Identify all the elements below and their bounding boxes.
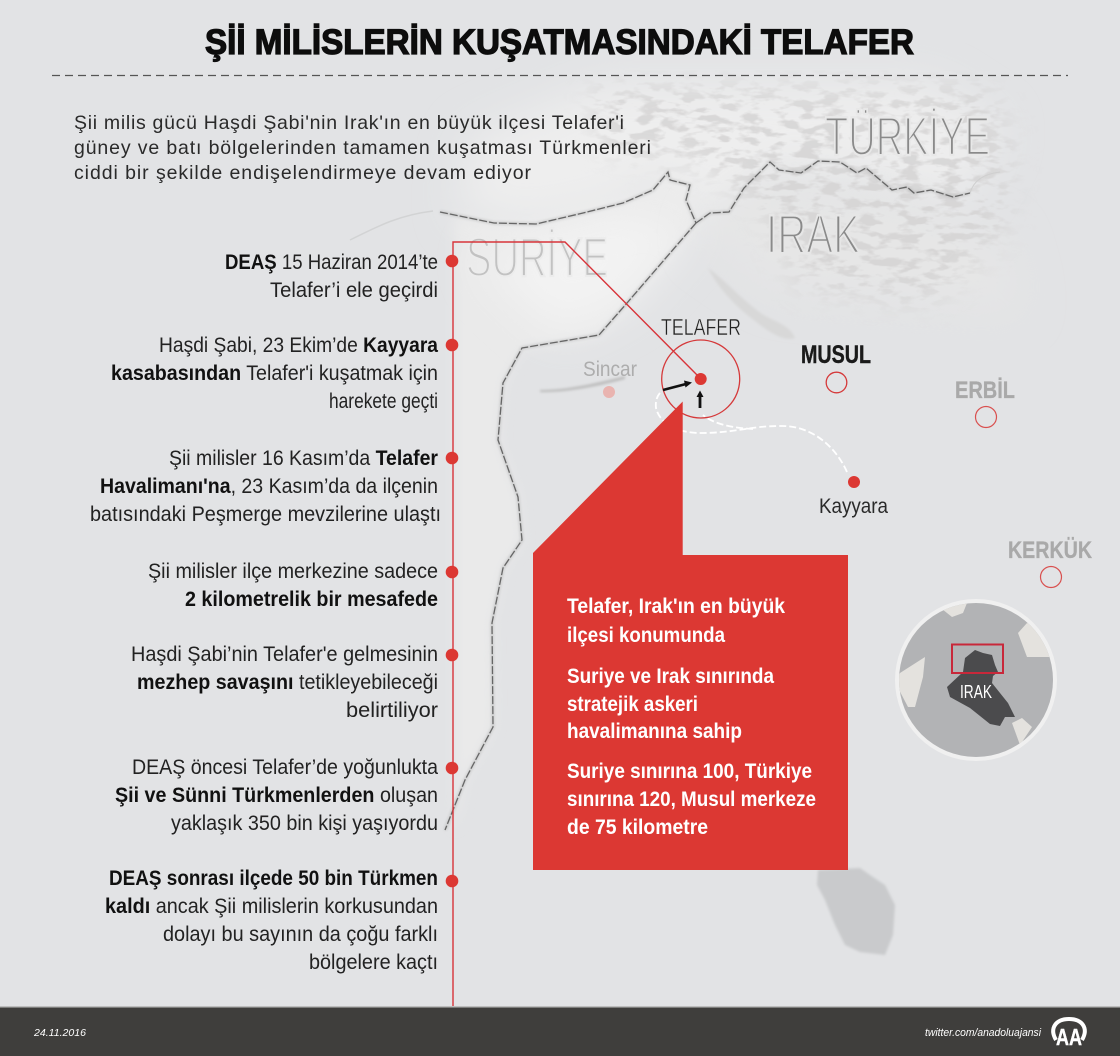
locator label: IRAK xyxy=(960,682,992,702)
intro text: ciddi bir şekilde endişelendirmeye devam ediyor xyxy=(74,162,532,184)
intro text: güney ve batı bölgelerinden tamamen kuşatması Türkmenleri xyxy=(74,137,651,159)
timeline item 5: Haşdi Şabi’nin Telafer'e gelmesinin xyxy=(131,643,438,666)
marker: Telafer xyxy=(662,340,740,418)
fact 2 xyxy=(567,665,774,743)
logo: Anadolu Agency xyxy=(1053,1019,1085,1050)
fact 3: Suriye sınırına 100, Türkiye xyxy=(567,760,812,783)
intro text xyxy=(74,112,651,184)
marker: Kerkük xyxy=(1040,566,1062,588)
timeline item 4: Şii milisler ilçe merkezine sadece xyxy=(148,560,438,583)
timeline item 6 xyxy=(115,756,438,835)
timeline item 3: batısındaki Peşmerge mevzilerine ulaştı xyxy=(90,503,441,526)
logo: Anadolu Agency: AA xyxy=(1056,1024,1082,1050)
timeline item 3: Şii milisler 16 Kasım’da Telafer xyxy=(169,447,438,470)
timeline item 2: kasabasından Telafer'i kuşatmak için xyxy=(111,362,438,385)
timeline item 5: belirtiliyor xyxy=(346,699,438,722)
locator map xyxy=(895,599,1057,761)
timeline item 3 xyxy=(90,447,441,526)
timeline item 2: harekete geçti xyxy=(329,390,438,413)
footer bar xyxy=(0,1006,1120,1056)
fact 3: de 75 kilometre xyxy=(567,816,708,839)
marker: Kayyara xyxy=(848,476,860,488)
map: country borders xyxy=(440,161,970,830)
timeline item 7: DEAŞ sonrası ilçede 50 bin Türkmen xyxy=(109,867,438,890)
timeline item 5 xyxy=(131,643,438,722)
country label: Suriye: SURİYE xyxy=(466,226,608,288)
fact 3 xyxy=(567,760,816,839)
marker: Musul xyxy=(826,372,847,393)
timeline item 7: kaldı ancak Şii milislerin korkusundan xyxy=(105,895,438,918)
timeline item 2: Haşdi Şabi, 23 Ekim’de Kayyara xyxy=(159,334,438,357)
fact 2: Suriye ve Irak sınırında xyxy=(567,665,774,688)
timeline item 6: DEAŞ öncesi Telafer’de yoğunlukta xyxy=(132,756,438,779)
timeline item 5: mezhep savaşını tetikleyebileceği xyxy=(137,671,438,694)
label: Kayyara: Kayyara xyxy=(819,495,888,518)
label: Telafer: TELAFER xyxy=(661,314,741,340)
timeline line and connector to Telafer xyxy=(453,242,701,1007)
fact 2: havalimanına sahip xyxy=(567,720,742,743)
label: Sincar: Sincar xyxy=(583,358,637,381)
fact 1 xyxy=(567,595,785,647)
route from Kayyara to Telafer xyxy=(656,391,847,472)
timeline item 1 xyxy=(225,251,438,302)
fact 2: stratejik askeri xyxy=(567,693,698,716)
title: Şİİ MİLİSLERİN KUŞATMASINDAKİ TELAFER xyxy=(205,23,914,62)
source link: twitter.com/anadoluajansi xyxy=(925,1027,1042,1039)
label: Kerkük: KERKÜK xyxy=(1008,537,1093,564)
timeline item 6: yaklaşık 350 bin kişi yaşıyordu xyxy=(171,812,438,835)
date: 24.11.2016 xyxy=(33,1028,86,1039)
arrow: south advance xyxy=(696,390,704,408)
timeline item 2 xyxy=(111,334,438,413)
label: Musul: MUSUL xyxy=(801,341,871,369)
timeline item 7: bölgelere kaçtı xyxy=(309,951,438,974)
label: Erbil: ERBİL xyxy=(955,377,1015,404)
fact 3: sınırına 120, Musul merkeze xyxy=(567,788,816,811)
marker: Erbil xyxy=(976,406,996,428)
fact 1: ilçesi konumunda xyxy=(567,624,725,647)
marker: Sincar xyxy=(603,386,615,398)
timeline item 3: Havalimanı'na, 23 Kasım’da da ilçenin xyxy=(100,475,438,498)
timeline item 6: Şii ve Sünni Türkmenlerden oluşan xyxy=(115,784,438,807)
timeline item 1: Telafer’i ele geçirdi xyxy=(270,279,438,302)
timeline item 7: dolayı bu sayının da çoğu farklı xyxy=(163,923,438,946)
timeline item 4 xyxy=(148,560,438,611)
arrow: west advance xyxy=(663,380,692,390)
panel: Telafer facts callout xyxy=(533,402,848,870)
timeline markers xyxy=(446,255,458,887)
timeline item 4: 2 kilometrelik bir mesafede xyxy=(185,588,438,611)
fact 1: Telafer, Irak'ın en büyük xyxy=(567,595,785,618)
country label: Irak: IRAK xyxy=(766,203,860,265)
timeline item 1: DEAŞ 15 Haziran 2014’te xyxy=(225,251,438,274)
intro text: Şii milis gücü Haşdi Şabi'nin Irak'ın en büyük ilçesi Telafer'i xyxy=(74,112,624,134)
country label: Türkiye: TÜRKİYE xyxy=(825,105,990,167)
timeline item 7 xyxy=(105,867,438,974)
title divider xyxy=(52,74,1068,76)
map: terrain xyxy=(350,70,1120,955)
